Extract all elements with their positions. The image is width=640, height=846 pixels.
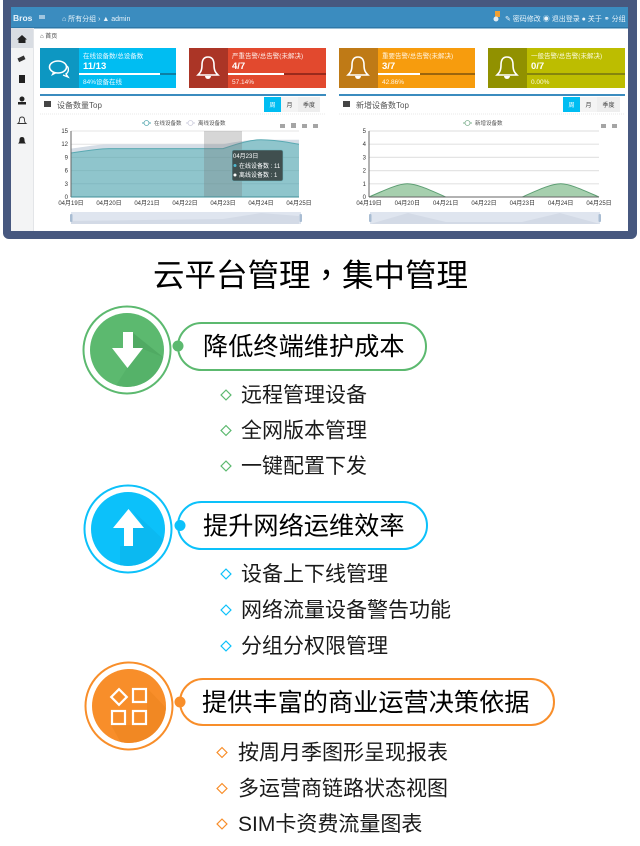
sidebar — [11, 28, 34, 231]
range slider — [70, 212, 302, 224]
line area chart: 9 — [65, 156, 69, 162]
list: 分组分权限管理 — [241, 635, 388, 658]
legend: 新增设备数 — [475, 119, 503, 127]
line area chart: 04月20日 — [96, 200, 122, 207]
list: 设备上下线管理 — [241, 563, 388, 586]
card: critical alarms: 4/7 — [232, 61, 245, 72]
panel: device count chart — [40, 94, 326, 224]
area chart: 5 — [363, 129, 367, 135]
top navigation bar: ⌂ 所有分组 › ▲ admin — [62, 14, 130, 23]
panel: new device chart: 周 — [568, 102, 575, 109]
icon: app grid — [86, 662, 172, 750]
area chart: 04月21日 — [433, 200, 458, 207]
list: 全网版本管理 — [241, 420, 367, 442]
area chart: 3 — [363, 156, 367, 162]
toolbox icons — [601, 124, 617, 128]
area chart: 04月23日 — [510, 200, 535, 207]
panel: device count chart: 季度 — [303, 101, 315, 109]
heading pill — [172, 323, 426, 370]
card: major alarms: 3/7 — [382, 61, 395, 72]
tooltip: 离线设备数 : 1 — [239, 171, 278, 179]
list: 网络流量设备警告功能 — [241, 599, 451, 622]
card: critical alarms: 严重告警/总告警(未解决) — [232, 51, 303, 60]
card: critical alarms: 57.14% — [232, 79, 254, 86]
heading pill — [174, 679, 554, 725]
line area chart — [58, 129, 312, 207]
card: minor alarms: 一般告警/总告警(未解决) — [531, 51, 602, 60]
line area chart: 04月19日 — [58, 200, 84, 207]
card: major alarms — [339, 48, 475, 88]
card: online devices: 11/13 — [83, 61, 106, 72]
area chart — [356, 129, 612, 207]
card: online devices: 在线设备数/总设备数 — [83, 51, 144, 60]
range slider — [369, 212, 601, 224]
line area chart: 04月25日 — [286, 200, 312, 207]
panel: new device chart: 新增设备数Top — [356, 100, 409, 110]
list: 一键配置下发 — [241, 455, 367, 478]
section: business decisions — [86, 662, 554, 836]
tooltip: 04月23日 — [233, 153, 258, 160]
card: online devices: 84%设备在线 — [83, 77, 123, 86]
panel: device count chart: 月 — [286, 102, 293, 109]
area chart: 0 — [363, 195, 367, 201]
legend — [142, 119, 226, 127]
area chart: 04月22日 — [471, 200, 497, 207]
section: maintenance cost — [84, 306, 426, 478]
card: major alarms: 42.86% — [382, 79, 404, 86]
line area chart: 04月24日 — [248, 200, 274, 207]
line area chart: 12 — [61, 142, 69, 148]
area chart: 04月20日 — [395, 200, 420, 207]
icon: up arrow — [84, 486, 172, 575]
breadcrumb: ⌂ 首页 — [40, 32, 57, 40]
card: major alarms: 重要告警/总告警(未解决) — [382, 51, 453, 60]
list — [221, 563, 451, 658]
panel: device count chart: 周 — [269, 102, 276, 109]
icon: down arrow — [84, 306, 170, 395]
list: 按周月季图形呈现报表 — [238, 742, 448, 764]
panel: new device chart: 月 — [585, 102, 592, 109]
line area chart: 6 — [65, 168, 69, 174]
line area chart: 3 — [65, 182, 69, 188]
top navigation bar: ✎ 密码修改 ◉ 退出登录 ● 关于 ⚭ 分组 — [505, 14, 626, 23]
area chart: 2 — [363, 168, 367, 174]
legend: 在线设备数 — [154, 119, 182, 127]
card: minor alarms: 0.00% — [531, 79, 550, 86]
panel: device count chart: 设备数量Top — [57, 100, 102, 110]
list: 远程管理设备 — [241, 384, 367, 407]
list: 多运营商链路状态视图 — [238, 778, 448, 800]
heading pill: 提升网络运维效率 — [203, 512, 404, 540]
title: 云平台管理，集中管理 — [153, 250, 468, 296]
panel: new device chart: 季度 — [602, 101, 615, 109]
area chart: 1 — [363, 182, 367, 188]
card: online devices — [40, 48, 176, 88]
card: minor alarms: 0/7 — [531, 61, 544, 72]
list: SIM卡资费流量图表 — [238, 813, 422, 836]
heading pill — [174, 502, 427, 549]
top navigation bar — [11, 7, 628, 28]
dashboard screenshot — [3, 0, 637, 239]
area chart: 04月24日 — [548, 200, 573, 207]
heading pill: 降低终端维护成本 — [203, 333, 404, 361]
card: minor alarms — [488, 48, 625, 88]
line area chart: 0 — [65, 195, 69, 201]
top navigation bar: Bros — [13, 13, 33, 23]
toolbox icons — [280, 123, 318, 128]
list — [217, 742, 448, 836]
tooltip: 在线设备数 : 11 — [239, 162, 281, 170]
area chart: 04月19日 — [356, 200, 382, 207]
card: critical alarms — [189, 48, 326, 88]
heading pill: 提供丰富的商业运营决策依据 — [202, 689, 529, 717]
list — [221, 384, 367, 478]
legend — [463, 119, 503, 127]
section: network efficiency — [84, 486, 451, 658]
area chart: 4 — [363, 142, 367, 148]
tooltip — [232, 150, 283, 181]
legend: 离线设备数 — [198, 119, 226, 127]
line area chart: 04月23日 — [210, 200, 236, 207]
line area chart: 04月21日 — [134, 200, 160, 207]
line area chart: 04月22日 — [172, 200, 198, 207]
area chart: 04月25日 — [586, 200, 612, 207]
panel: new device chart — [339, 94, 625, 224]
line area chart: 15 — [61, 129, 69, 135]
